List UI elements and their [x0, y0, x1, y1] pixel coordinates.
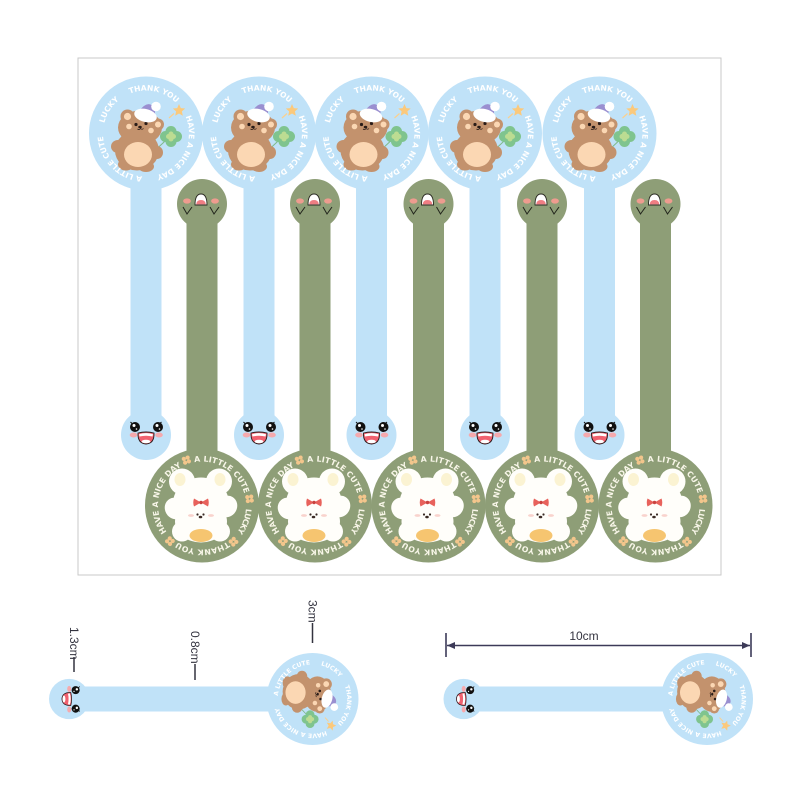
smiling face: [62, 686, 80, 713]
dimension label: 3cm: [306, 600, 320, 643]
circular text: THANK YOU HAVE A NICE DAYA LITTLE CUTELUCKY: [436, 84, 534, 182]
horizontal sticker: dimension example right: [444, 653, 753, 745]
dimension arrow: 10cm: 10cm: [569, 629, 599, 643]
smiling face: [243, 422, 276, 444]
bear art: [676, 671, 733, 731]
strip shape: [89, 76, 203, 460]
strip shape: [444, 653, 753, 745]
strip shape: [428, 76, 542, 460]
blue bear sticker 2: [202, 76, 316, 460]
face: [410, 194, 446, 214]
smiling face: [130, 422, 163, 444]
strip shape: [202, 76, 316, 460]
rabbit art: [614, 468, 695, 542]
dimension label: 0.8cm: 0.8cm: [188, 631, 202, 664]
smiling face: [469, 422, 502, 444]
rabbit art: [501, 468, 581, 542]
smiling face: [355, 422, 388, 444]
bear art: [111, 102, 185, 172]
circular text: THANK YOU HAVE A NICE DAYA LITTLE CUTELUCKY: [98, 84, 195, 182]
face: [183, 194, 219, 214]
bear art: [281, 671, 338, 731]
circular text: THANK YOU HAVE A NICE DAYA LITTLE CUTELUCKY: [323, 84, 420, 182]
smiling face: [583, 422, 616, 444]
circular text: A LITTLE CUTE LUCKY THANK YOUHAVE A NICE DAY: [606, 456, 705, 556]
face: [636, 194, 672, 214]
strip shape: [542, 76, 656, 460]
circular text: A LITTLE CUTE LUCKY THANK YOUHAVE A NICE DAY: [265, 456, 364, 556]
bear art: [564, 102, 639, 172]
green rabbit sticker 1: [145, 179, 258, 562]
dimension label: 1.3cm: 1.3cm: [67, 627, 81, 660]
strip shape: [485, 179, 599, 562]
strip shape: [258, 179, 372, 562]
flower separators: [277, 455, 367, 548]
blue bear sticker 4: [428, 76, 542, 460]
flower separators: [618, 455, 708, 548]
strip shape: [598, 179, 712, 562]
circular text: THANK YOU HAVE A NICE DAYA LITTLE CUTELUCKY: [551, 84, 648, 182]
circular text: A LITTLE CUTE LUCKY THANK YOUHAVE A NICE DAY: [378, 456, 478, 556]
bear art: [224, 102, 298, 172]
blue bear sticker 3: [315, 76, 428, 460]
horizontal sticker: dimension example left: [49, 653, 358, 745]
flower separators: [504, 455, 594, 548]
green rabbit sticker 3: [372, 179, 486, 562]
blue bear sticker 5: [542, 76, 656, 460]
dimension arrow: 10cm: [446, 629, 751, 657]
circular text: THANK YOU HAVE A NICE DAYA LITTLE CUTELUCKY: [210, 84, 308, 182]
flower separators: [391, 455, 481, 548]
green rabbit sticker 2: [258, 179, 372, 562]
rabbit art: [161, 468, 241, 542]
dimension label: 0.8cm: [188, 631, 202, 680]
green rabbit sticker 5: [598, 179, 712, 562]
green rabbit sticker 4: [485, 179, 599, 562]
circular text: A LITTLE CUTE LUCKY THANK YOUHAVE A NICE DAY: [492, 456, 592, 556]
strip shape: [49, 653, 358, 745]
circular text: A LITTLE CUTE LUCKY THANK YOUHAVE A NICE DAY: [152, 456, 252, 556]
face: [523, 194, 559, 214]
bear art: [336, 102, 411, 172]
strip shape: [372, 179, 486, 562]
rabbit art: [387, 468, 468, 542]
circular text: THANK YOU HAVE A NICE DAYA LITTLE CUTE LUCKY: [668, 660, 746, 738]
strip shape: [314, 76, 428, 460]
blue bear sticker 1: [89, 76, 202, 460]
face: [296, 194, 332, 214]
rabbit art: [274, 468, 354, 542]
bear art: [450, 102, 524, 172]
strip shape: [145, 179, 259, 562]
sheet background: [78, 58, 721, 575]
flower separators: [164, 455, 254, 548]
smiling face: [456, 686, 474, 713]
dimension label: 3cm: 3cm: [306, 600, 320, 623]
circular text: THANK YOU HAVE A NICE DAYA LITTLE CUTE LUCKY: [274, 660, 352, 738]
